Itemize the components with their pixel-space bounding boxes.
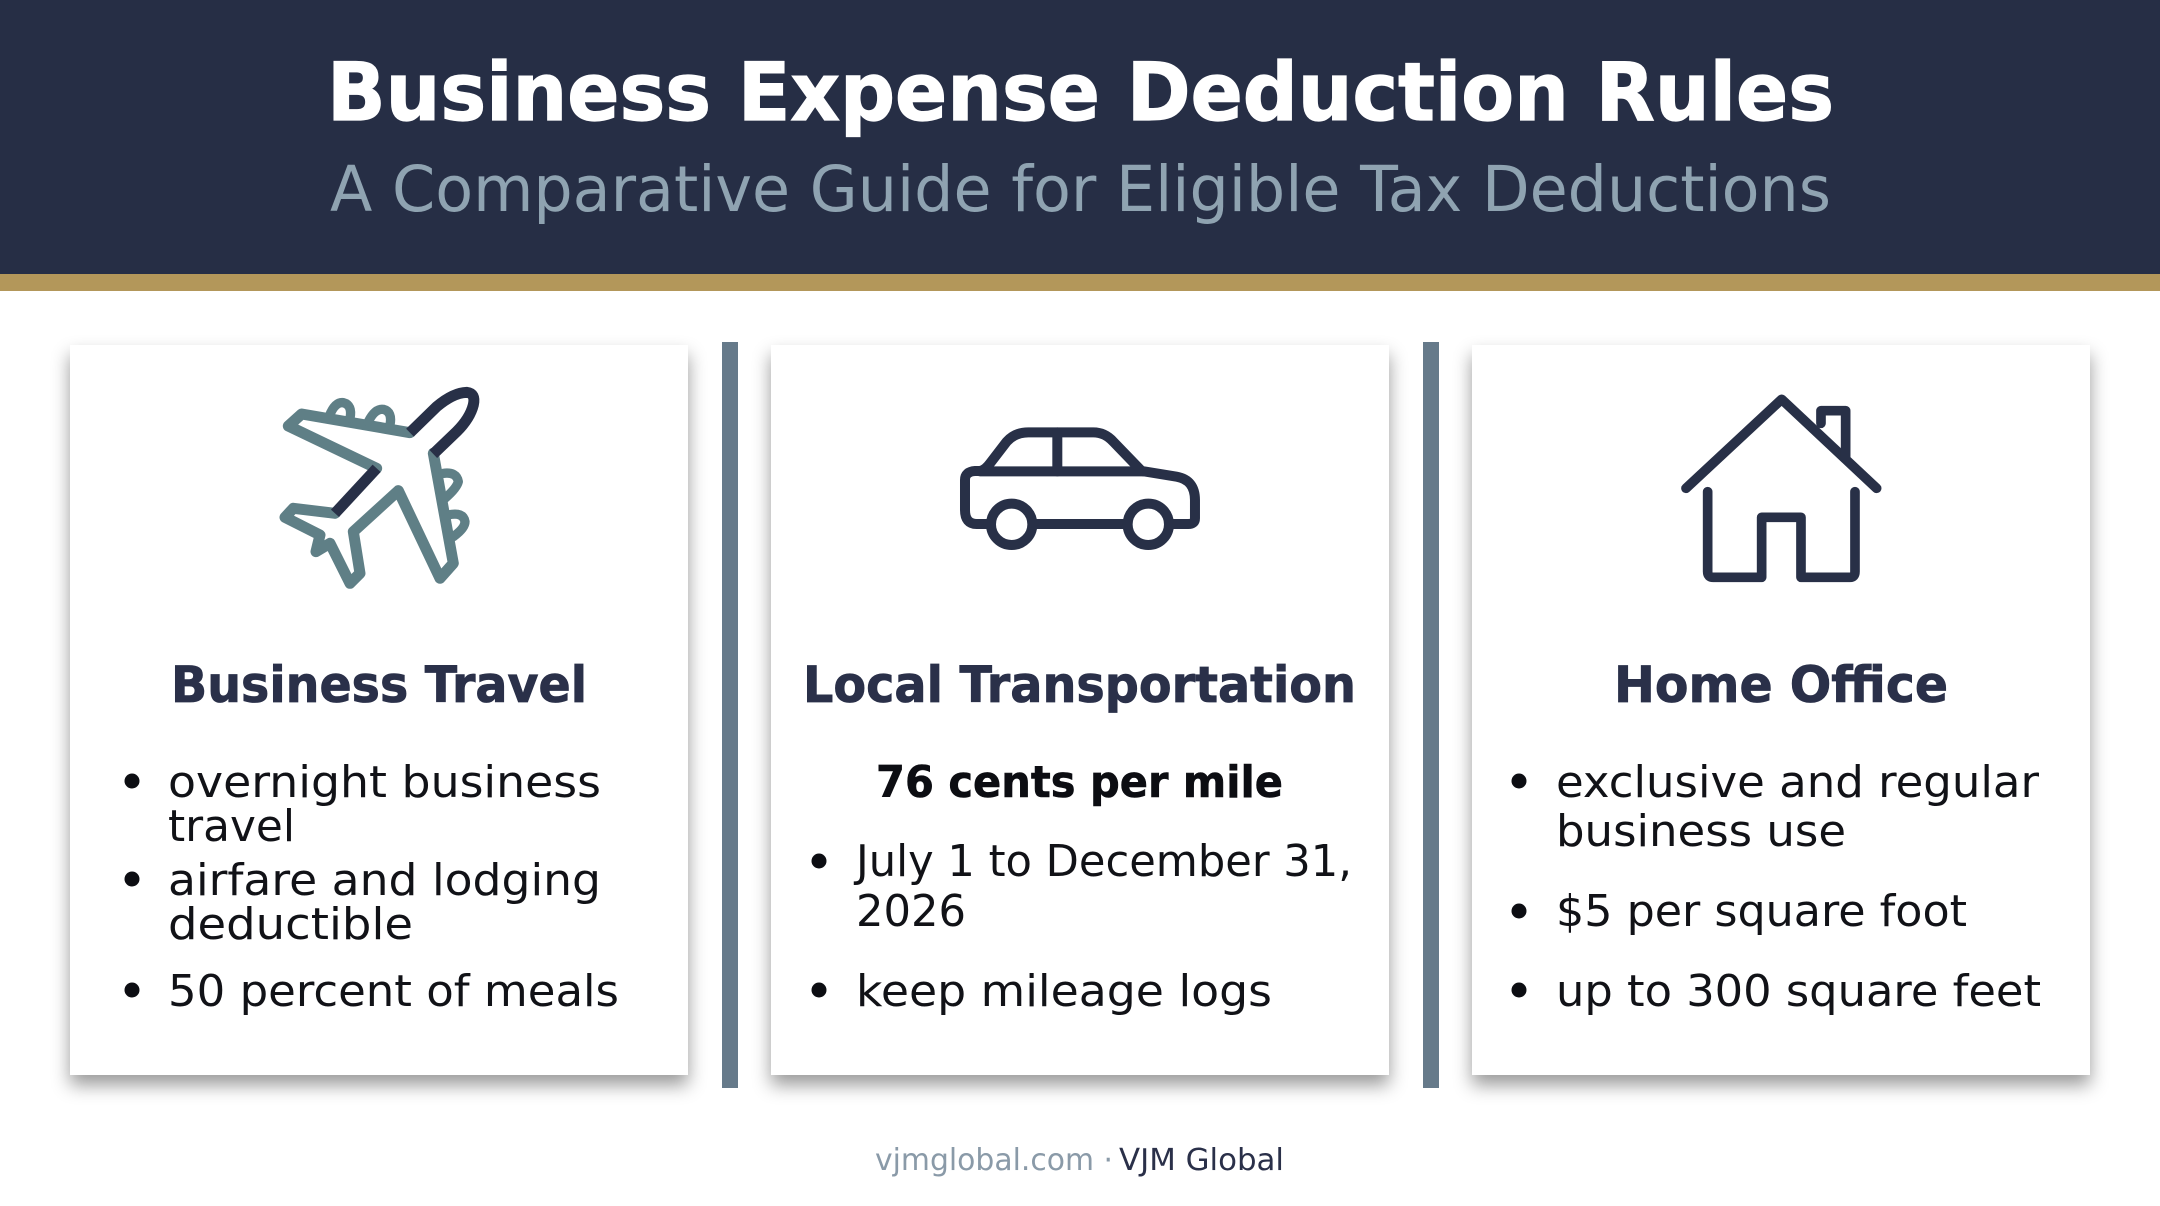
heading: local transportation: Local Transportation xyxy=(803,656,1356,714)
icon: house xyxy=(1686,399,1877,577)
bullet list: home office: business use xyxy=(1556,806,1846,857)
bullet list: home office: up to 300 square feet xyxy=(1556,966,2041,1017)
divider left xyxy=(722,342,738,1088)
panel: local transportation xyxy=(771,345,1389,1075)
icon: airplane xyxy=(285,392,474,583)
icon: car xyxy=(965,432,1195,545)
gold rule xyxy=(0,274,2160,291)
header banner xyxy=(0,0,2160,274)
footer source line xyxy=(875,1143,1284,1178)
divider right xyxy=(1423,342,1439,1088)
bullet list: business travel: overnight business xyxy=(168,757,601,808)
bullet list: local transportation: keep mileage logs xyxy=(856,966,1272,1017)
bullet list: business travel: airfare and lodging xyxy=(168,855,601,906)
subtitle: A Comparative Guide for Eligible Tax Deductions xyxy=(330,153,1831,226)
heading: business travel: Business Travel xyxy=(171,656,587,714)
heading: home office: Home Office xyxy=(1614,656,1948,714)
bullet list: business travel: 50 percent of meals xyxy=(168,966,619,1017)
bullet list: local transportation: 2026 xyxy=(856,886,966,937)
bullet list: business travel xyxy=(124,757,619,1017)
bullet list: home office: exclusive and regular xyxy=(1556,757,2040,808)
bullet list: home office: $5 per square foot xyxy=(1556,886,1967,937)
bullet list: home office xyxy=(1512,757,2041,1017)
highlighted rate: 76 cents per mile xyxy=(876,757,1283,808)
footer source line: VJM Global xyxy=(1119,1143,1284,1178)
bullet list: business travel: deductible xyxy=(168,899,413,950)
bullet list: business travel: travel xyxy=(168,801,295,852)
bullet list: local transportation xyxy=(812,836,1352,1017)
panel: business travel xyxy=(70,345,688,1075)
footer source line: vjmglobal.com · xyxy=(875,1143,1113,1178)
bullet list: local transportation: July 1 to December 31, xyxy=(853,836,1352,887)
card background xyxy=(771,345,1389,1075)
panel: home office xyxy=(1472,345,2090,1075)
card background xyxy=(1472,345,2090,1075)
card background xyxy=(70,345,688,1075)
title: Business Expense Deduction Rules xyxy=(327,46,1834,139)
